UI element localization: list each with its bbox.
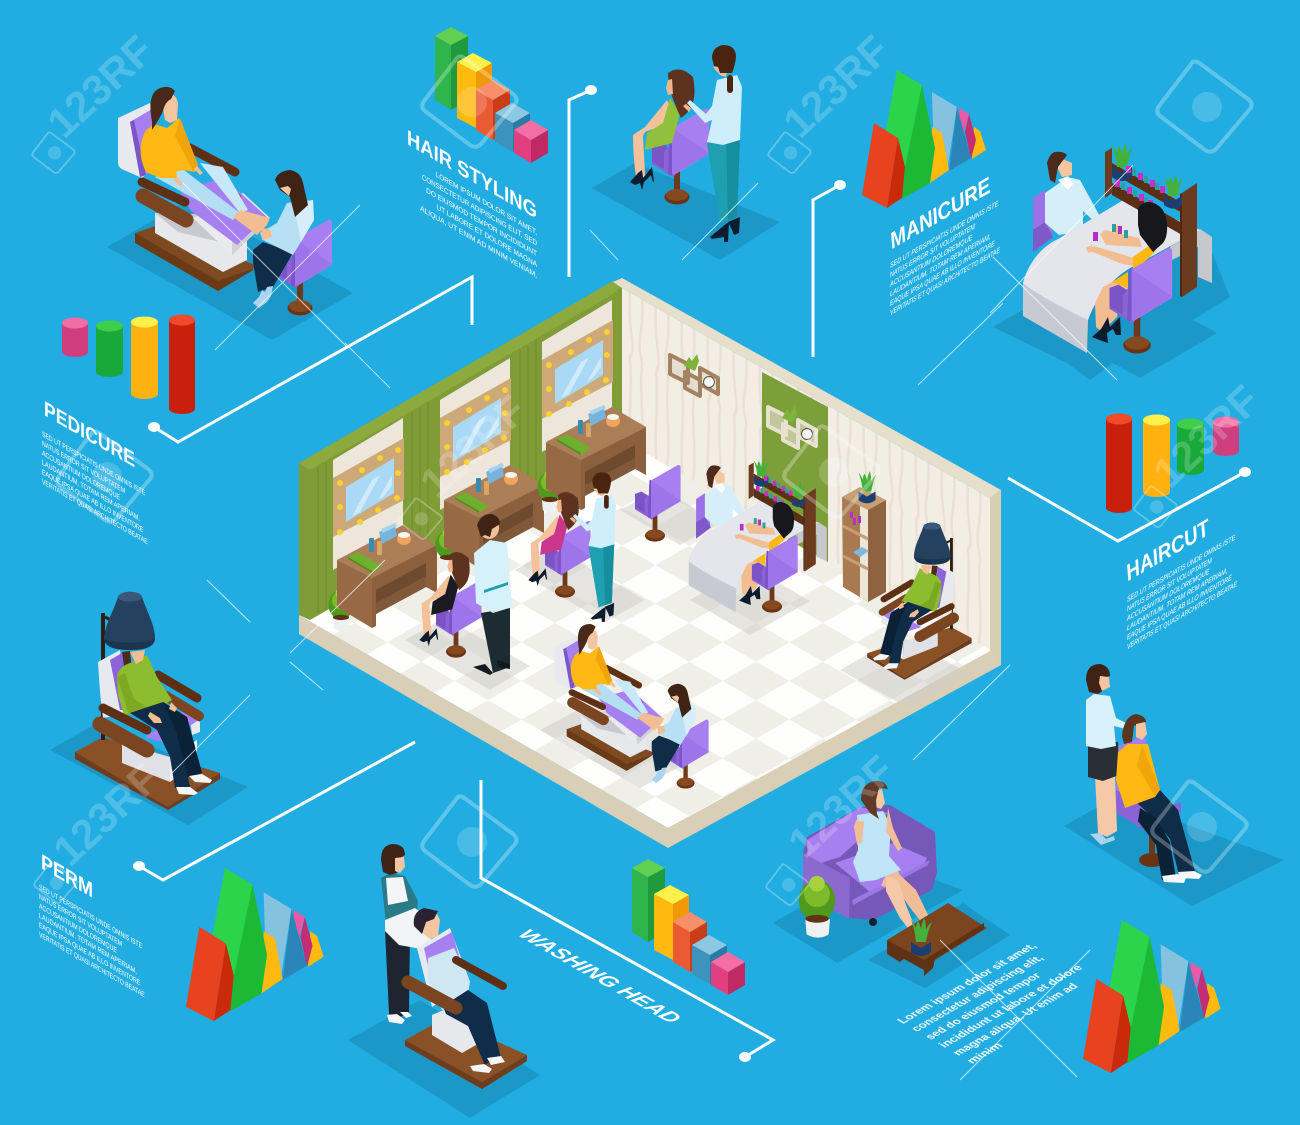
left green wall	[299, 281, 622, 620]
chart: hair styling boxes	[435, 27, 548, 163]
text block: haircut: LAUDANTIUM, TOTAM REM APERIAM,	[1127, 565, 1227, 633]
panel: pedicure illustration	[107, 87, 353, 340]
wash basin	[385, 908, 437, 950]
text block: haircut: ACCUSANTIUM DOLOREMQUE	[1126, 566, 1209, 623]
text block: lounge: minim	[964, 1041, 1006, 1066]
stylist	[1086, 664, 1128, 845]
connector: perm	[133, 742, 415, 880]
heading: haircut: HAIRCUT	[1123, 514, 1213, 586]
chart: haircut cylinders	[1106, 414, 1239, 513]
panel: washing head illustration	[348, 844, 540, 1118]
text block: haircut: SED UT PERSPICIATIS UNDE OMNIS ISTE	[1127, 532, 1235, 604]
text block: pedicure: ACCUSANTIUM DOLOREMQUE	[42, 448, 120, 502]
text block: perm: LAUDANTIUM, TOTAM REM APERIAM,	[39, 910, 137, 976]
client in pedicure chair	[118, 87, 270, 291]
connector: pedicure	[148, 277, 472, 442]
text block: lounge: Lorem ipsum dolor sit amet,	[895, 942, 1040, 1026]
text block: manicure	[889, 197, 1000, 318]
wall cap	[613, 278, 1001, 498]
tiled floor	[299, 430, 1001, 828]
floor shadow	[50, 723, 248, 825]
text block: lounge: magna aliqua. Ut enim ad	[951, 982, 1081, 1058]
chart: washing head boxes	[632, 859, 745, 995]
pedicure station in room	[555, 624, 709, 789]
text block: pedicure: NATUS ERROR SIT VOLUPTATEM	[42, 438, 125, 496]
heading: pedicure: PEDICURE	[44, 397, 135, 473]
text block: manicure: EAQUE IPSA QUAE AB ILLO INVENTORE	[890, 238, 995, 308]
empty chair	[635, 465, 681, 542]
text block: hair styling: UT LABORE ET DOLORE MAGNA	[437, 202, 537, 269]
barber with client, near chair	[419, 514, 512, 675]
floor shadows	[773, 860, 1010, 988]
manicure table, technician and client	[1023, 143, 1212, 353]
panel: perm illustration	[50, 592, 248, 825]
text block: pedicure: EAQUE IPSA QUAE AB ILLO INVENTORE	[42, 467, 143, 535]
floor shadow	[993, 245, 1230, 380]
wall shelf: plant and clock	[670, 354, 718, 396]
panel: relaxing lounge illustration	[773, 781, 1010, 988]
coffee table	[887, 903, 987, 976]
text block: manicure: LAUDANTIUM, TOTAM REM APERIAM,	[890, 231, 990, 299]
wall shelf on green panel	[768, 406, 816, 448]
pedicurist on stool	[253, 170, 332, 316]
text block: perm: NATUS ERROR SIT VOLUPTATEM	[39, 891, 122, 949]
text block: haircut	[1126, 531, 1237, 652]
floor shadow	[348, 1000, 540, 1118]
floor shadow	[592, 163, 780, 260]
armrests	[408, 960, 503, 1008]
text block: pedicure: LAUDANTIUM, TOTAM REM APERIAM,	[42, 457, 140, 523]
text block: lounge: incididunt ut labore et dolore	[937, 963, 1086, 1050]
panel: manicure illustration	[993, 143, 1230, 380]
bookcase	[842, 471, 886, 602]
text block: perm	[39, 882, 145, 1000]
text block: lounge	[895, 939, 1113, 1066]
heading: perm: PERM	[41, 850, 93, 903]
manicure station in room	[689, 459, 827, 613]
salon chair	[652, 109, 709, 204]
stylist with client, far chair	[528, 472, 616, 622]
heading: hair styling: HAIR STYLING	[407, 126, 537, 224]
floor shadows	[405, 488, 970, 788]
curtain fold lines	[318, 340, 536, 613]
text block: perm: EAQUE IPSA QUAE AB ILLO INVENTORE	[39, 920, 140, 988]
watermark overlay: 123RF	[38, 26, 162, 147]
hair dryer station in room	[867, 523, 972, 680]
connector: haircut	[1008, 467, 1251, 541]
seated woman	[853, 781, 930, 928]
chart: manicure peaks	[862, 70, 986, 208]
text block: pedicure: SED UT PERSPICIATIS UNDE OMNIS ISTE	[42, 429, 145, 498]
text block: perm: VERITATIS ET QUASI ARCHITECTO BEATAE	[39, 929, 145, 1000]
stylist	[683, 45, 742, 242]
text block: hair styling: CONSECTETUR ADIPISCING ELIT, SED	[422, 172, 537, 248]
watermark overlay: 123RF	[411, 386, 535, 507]
text block: haircut: EAQUE IPSA QUAE AB ILLO INVENTORE	[1127, 572, 1232, 642]
text block: pedicure	[42, 429, 148, 547]
panel: central salon room	[299, 278, 1001, 848]
vanity station 3	[537, 300, 646, 512]
heading: manicure: MANICURE	[887, 172, 993, 254]
chair	[1115, 735, 1181, 867]
text block: lounge: sed do eiusmod tempor	[923, 971, 1045, 1042]
wash chair back	[417, 928, 470, 1007]
floor shadow	[107, 200, 353, 340]
potted bush	[799, 876, 835, 938]
heading: washing head: WASHING HEAD	[513, 926, 686, 1027]
watermark overlay: 123RF	[774, 26, 898, 147]
connector: manicure	[813, 180, 846, 357]
text block: perm: SED UT PERSPICIATIS UNDE OMNIS ISTE	[39, 882, 142, 951]
chart: lounge peaks	[1083, 920, 1221, 1073]
text block: manicure: NATUS ERROR SIT VOLUPTATEM	[890, 221, 975, 280]
text block: manicure: SED UT PERSPICIATIS UNDE OMNIS ISTE	[890, 198, 998, 270]
wall end	[990, 490, 1001, 665]
connector: washing head	[481, 780, 773, 1062]
text block: hair styling: ALIQUA, UT ENIM AD MINIM VENIAM,	[420, 203, 537, 280]
vanity station 2	[435, 358, 544, 570]
text block: hair styling: LOREM IPSUM DOLOR SIT AMET,	[436, 169, 537, 237]
text block: perm: ACCUSANTIUM DOLOREMQUE	[39, 901, 117, 955]
text block: hair styling	[420, 160, 537, 280]
chair base	[405, 1003, 527, 1089]
sofa	[803, 805, 937, 926]
wall top edge	[299, 281, 622, 470]
chart: perm peaks	[186, 868, 324, 1021]
text block: manicure: ACCUSANTIUM DOLOREMQUE	[889, 232, 972, 289]
client under hair dryer	[75, 592, 220, 810]
green wall panel	[762, 372, 828, 562]
floor shadow	[1064, 798, 1284, 906]
room base	[299, 615, 1001, 848]
text block: manicure: VERITATIS ET QUASI ARCHITECTO BEATAE	[890, 245, 1000, 318]
seated client	[1116, 714, 1202, 883]
text block: hair styling: DO EIUSMOD TEMPOR INCIDIDUNT	[426, 185, 537, 259]
seated client	[630, 69, 694, 190]
watermark overlay: 123RF	[779, 746, 903, 867]
text block: pedicure: VERITATIS ET QUASI ARCHITECTO BEATAE	[42, 476, 148, 547]
panel: haircut illustration	[1064, 664, 1284, 906]
text block: lounge: consectetur adipiscing elit,	[909, 954, 1047, 1034]
client	[414, 908, 505, 1073]
text block: haircut: VERITATIS ET QUASI ARCHITECTO BEATAE	[1127, 579, 1237, 652]
stylist	[381, 844, 418, 1024]
watermark overlay: 123RF	[44, 754, 168, 875]
vanity station 1	[328, 418, 437, 630]
panel: hair styling illustration	[592, 45, 780, 260]
connector: hair styling	[569, 85, 597, 277]
table plant	[911, 918, 932, 956]
right wall	[622, 288, 990, 650]
text block: haircut: NATUS ERROR SIT VOLUPTATEM	[1127, 555, 1212, 614]
chart: pedicure cylinders	[62, 314, 195, 414]
watermark overlay: 123RF	[1144, 376, 1268, 497]
